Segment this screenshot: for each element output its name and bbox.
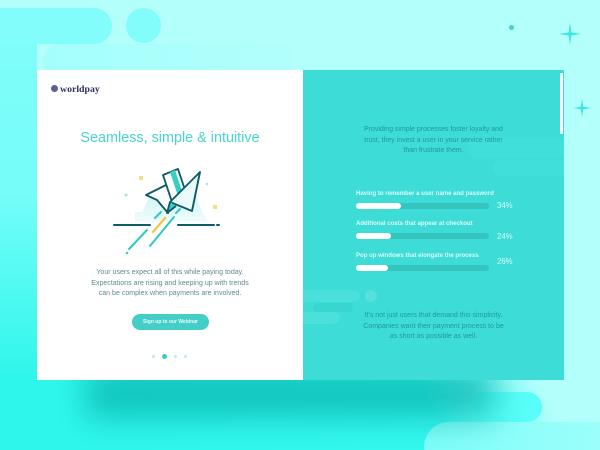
title: Seamless, simple & intuitive	[80, 130, 260, 146]
faded pill lower left	[273, 290, 360, 302]
icon: dot	[509, 25, 514, 30]
logo: worldpay	[51, 84, 100, 95]
background shape: bottom right pill lower	[424, 422, 600, 450]
front wing	[170, 172, 200, 211]
dot	[184, 355, 187, 358]
darker pill lower left	[313, 303, 353, 312]
value 2: 24%	[497, 232, 513, 241]
bar row 3	[356, 252, 513, 271]
body text: Expectations are rising and keeping up with trends	[91, 280, 249, 286]
background shape: top left pill	[0, 8, 112, 44]
icon: sparkle small	[573, 99, 591, 117]
closing text: It's not just users that demand this simplicity.	[365, 312, 502, 319]
pagination dots	[152, 354, 187, 359]
background shape: lower pill	[43, 44, 303, 80]
fold	[167, 202, 176, 213]
background shape: bottom right pill upper	[470, 392, 542, 422]
fill 1	[356, 203, 401, 209]
sparks	[124, 176, 217, 254]
icon: sparkle large	[559, 23, 581, 45]
fill 2	[356, 233, 391, 239]
button: webinar	[132, 314, 209, 330]
track 2	[356, 233, 489, 239]
bar row 1	[356, 190, 513, 210]
background shape: circle	[126, 8, 161, 43]
track 3	[356, 265, 489, 271]
ground line	[114, 224, 219, 226]
body text: Your users expect all of this while paying today.	[96, 269, 244, 276]
logo wordmark: worldpay	[60, 84, 100, 95]
value 1: 34%	[497, 201, 513, 210]
intro text: trust, they invest a user in your service rather	[364, 136, 503, 144]
faded pill top right lower	[493, 160, 593, 176]
yellow streak	[153, 218, 165, 232]
fill 3	[356, 265, 388, 271]
closing text: as short as possible as well.	[390, 333, 477, 340]
panel: right teal	[303, 70, 564, 380]
button: webinar: Sign up to our Webinar	[143, 319, 198, 325]
scrollbar	[560, 73, 562, 134]
body text	[91, 268, 249, 297]
background shape: left strip	[0, 8, 37, 380]
closing text	[363, 312, 504, 340]
bar chart	[356, 190, 513, 271]
speed streaks	[129, 209, 180, 249]
dot	[174, 355, 177, 358]
faded circle	[365, 290, 377, 302]
closing text: Companies want their payment process to be	[363, 322, 504, 330]
dot	[152, 355, 155, 358]
label 3: Pop up windows that elongate the process	[356, 253, 479, 259]
value 3: 26%	[497, 257, 513, 266]
bar row 2	[356, 220, 513, 241]
background shape: bottom gradient	[0, 300, 600, 450]
body text: can be complex when payments are involved.	[99, 290, 241, 297]
faded pill lower left 2	[273, 312, 340, 324]
card shadow	[85, 368, 495, 418]
track 1	[356, 203, 489, 209]
icon: globe	[51, 85, 58, 92]
panel: left white	[37, 70, 303, 380]
label 1: Having to remember a user name and password	[356, 191, 494, 197]
credit card	[163, 169, 187, 202]
intro text: Providing simple processes foster loyalty and	[364, 126, 503, 133]
faded pill top right	[468, 138, 588, 158]
illustration backdrop	[127, 188, 208, 222]
illustration: paper plane	[113, 168, 220, 254]
intro text: than frustrate them.	[403, 147, 464, 154]
intro text	[364, 126, 503, 154]
label 2: Additional costs that appear at checkout	[356, 221, 473, 227]
dot: active	[162, 354, 167, 359]
back wing	[146, 184, 183, 213]
